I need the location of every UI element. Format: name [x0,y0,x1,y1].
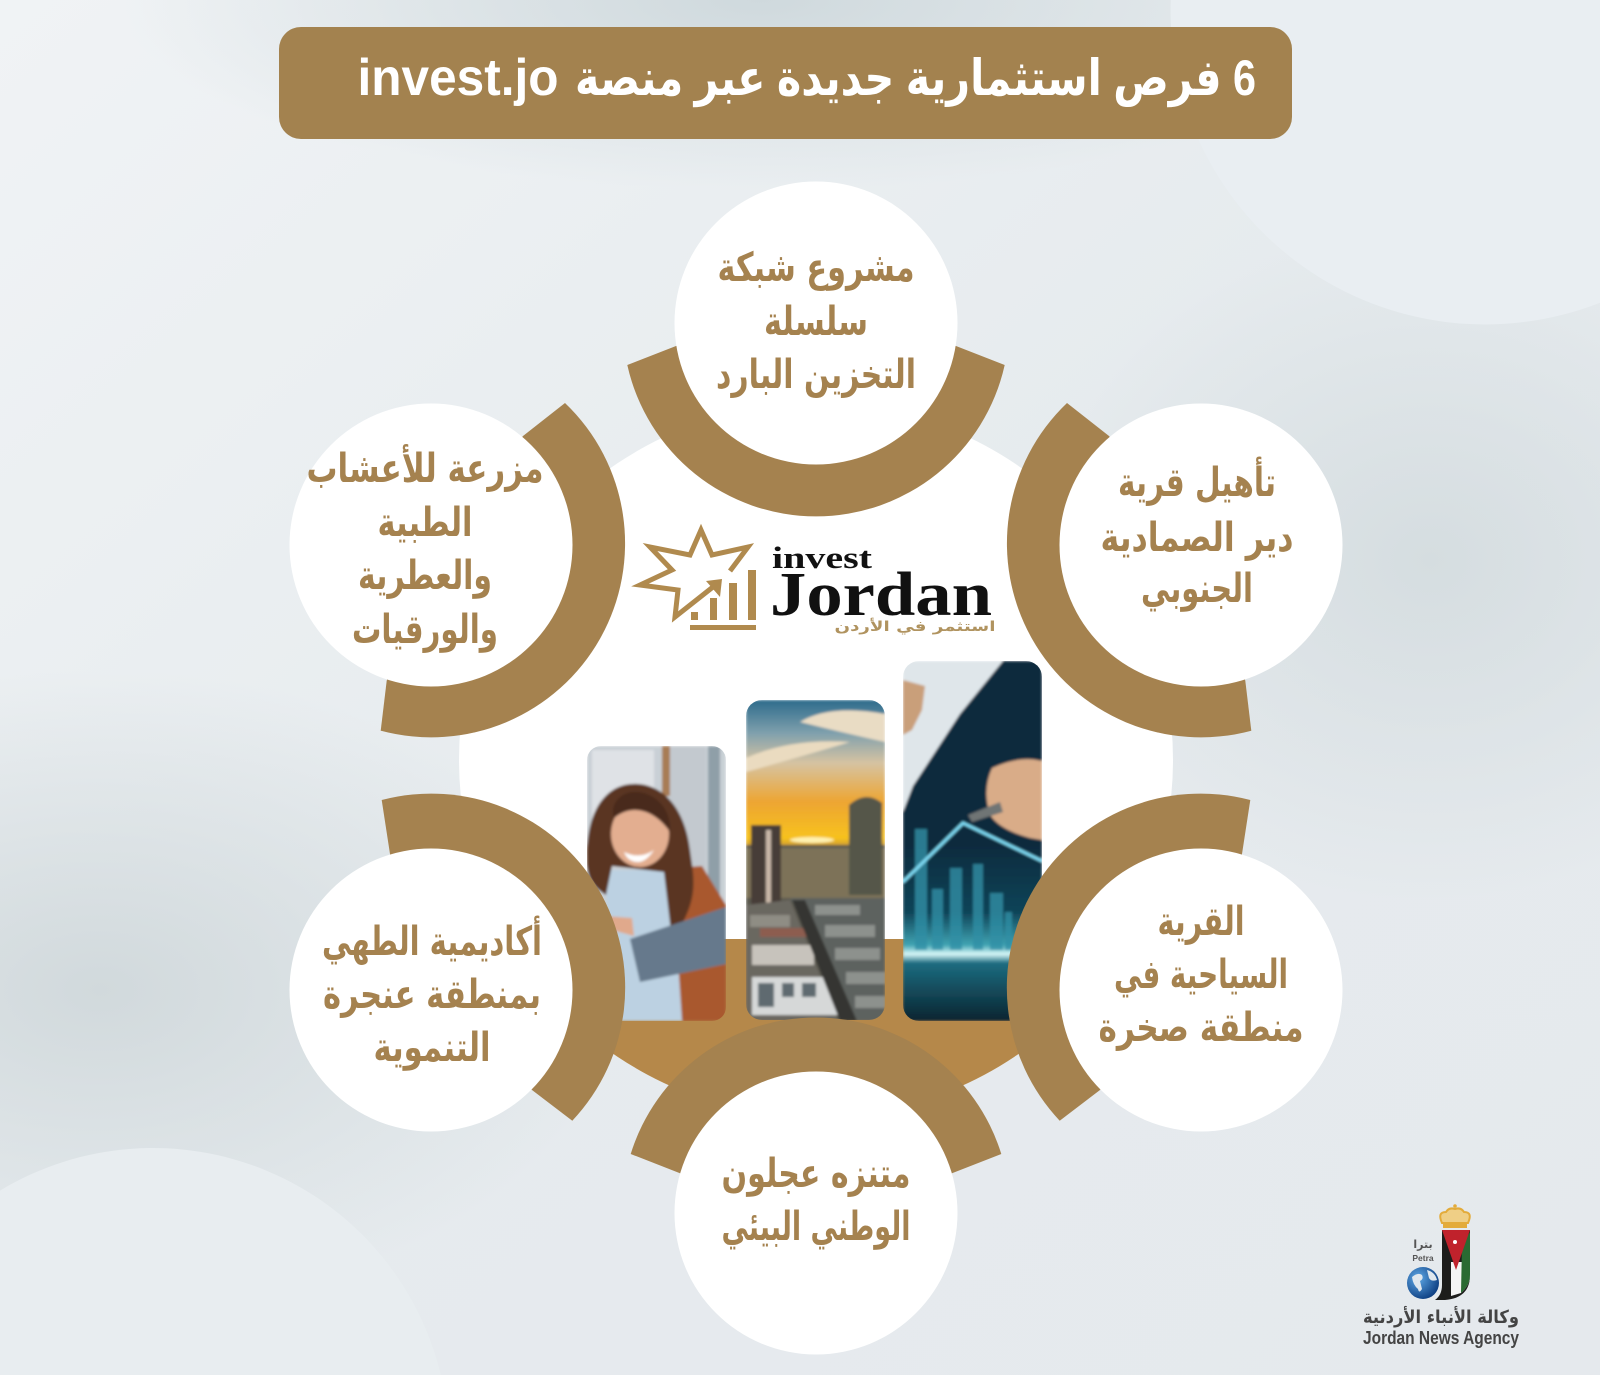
ring: upper right [1007,403,1251,737]
photo: woman with laptop [587,746,726,1021]
panel: Ajloun national park: الوطني البيئي [722,1204,910,1250]
logo arabic name small: بترا [1413,1238,1433,1251]
ring: lower right [1007,794,1250,1121]
icon: globe [1407,1267,1439,1299]
panel: culinary academy Anjara [290,848,572,1132]
agency english name: Jordan News Agency [1363,1328,1519,1348]
panel: tourist village Sakhra: منطقة صخرة [1098,1005,1304,1051]
icon: flag J [1435,1230,1470,1300]
logo icon: star and bars [640,530,756,630]
panel: herbs farm: والورقيات [352,607,498,653]
icon: crown [1440,1204,1470,1228]
panel: herbs farm: والعطرية [358,553,492,599]
photo: city skyline at sunset [746,700,885,1021]
logo arabic tagline: استثمر في الأردن [834,618,996,635]
panel: cold storage chain [674,182,958,464]
panel: Ajloun national park: متنزه عجلون [722,1151,910,1197]
panel: herbs farm: الطبية [378,500,472,546]
ring: bottom [631,1017,1001,1213]
panel: tourist village Sakhra [1060,848,1342,1132]
panel: Deir al-Samadiya village: دير الصمادية [1100,515,1294,561]
Petra agency logo [1363,1204,1519,1348]
central white disc with gold base [459,403,1173,1117]
ring: top [627,323,1005,516]
invest Jordan logo [640,530,996,635]
logo wordmark invest: invest [772,540,873,575]
panel: Deir al-Samadiya village: الجنوبي [1141,566,1253,612]
photo: hand pointing at neon chart [903,661,1042,1021]
logo wordmark Jordan: Jordan [770,561,992,629]
panel: tourist village Sakhra: القرية [1158,899,1244,945]
title banner: invest.jo [358,49,558,107]
panel: cold storage chain: مشروع شبكة [718,245,914,291]
title banner: 6 فرص استثمارية جديدة عبر منصة [575,50,1256,108]
panel: tourist village Sakhra: السياحية في [1114,952,1288,998]
panel: cold storage chain: التخزين البارد [716,352,916,398]
panel: herbs farm [290,404,572,686]
ring: upper left [381,403,625,737]
logo latin name small: Petra [1412,1253,1434,1263]
title banner [279,27,1292,139]
panel: Deir al-Samadiya village: تأهيل قرية [1118,456,1276,506]
panel: culinary academy Anjara: التنموية [374,1025,490,1071]
panel: Deir al-Samadiya village [1060,404,1342,686]
panel: culinary academy Anjara: بمنطقة عنجرة [323,972,541,1018]
panel: herbs farm: مزرعة للأعشاب [306,443,544,492]
panel: cold storage chain: سلسلة [764,299,868,345]
ring: lower left [382,794,625,1121]
panel: culinary academy Anjara: أكاديمية الطهي [322,915,542,965]
agency arabic name: وكالة الأنباء الأردنية [1363,1306,1519,1328]
panel: Ajloun national park [674,1072,958,1354]
